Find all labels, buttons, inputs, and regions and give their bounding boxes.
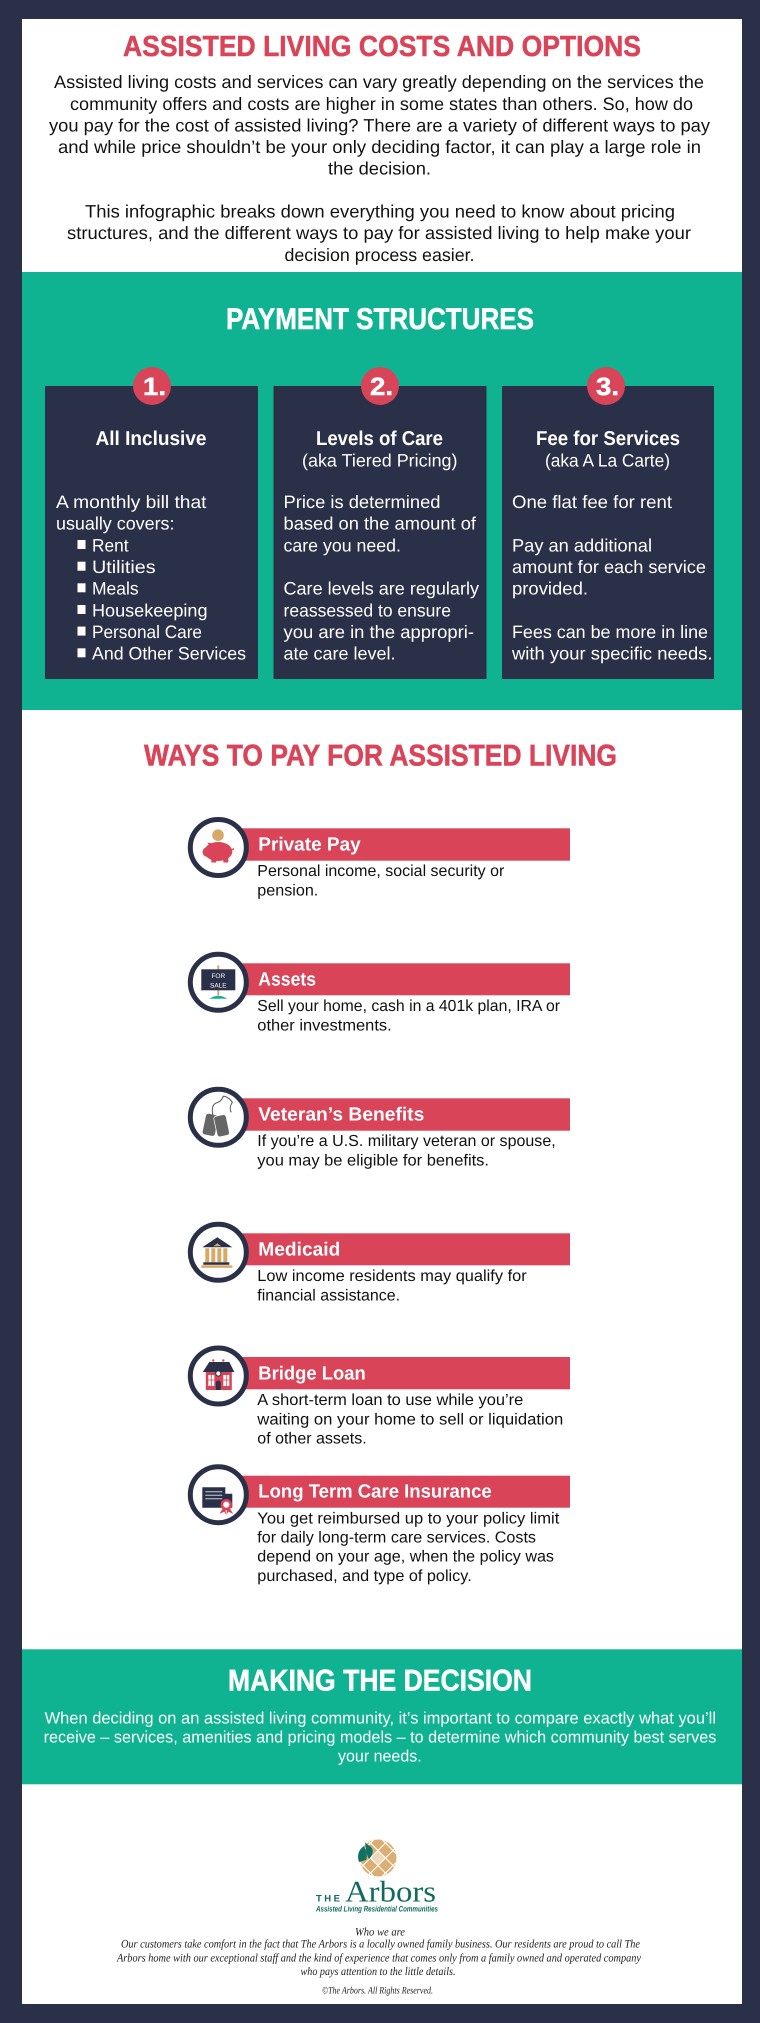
item: bridge loan: of other assets. — [257, 1430, 367, 1447]
card 2: levels of care: reassessed to ensure — [284, 600, 451, 620]
footer: who we are: Our customers take comfort in the fact that The Arbors is a locally owned family business. Our residents are proud to call The — [121, 1939, 640, 1951]
title: ASSISTED LIVING COSTS AND OPTIONS — [123, 31, 641, 63]
item: medicaid: Medicaid — [258, 1239, 340, 1260]
item: long term care insurance — [190, 1467, 570, 1585]
logo: the arbors: THE — [316, 1894, 340, 1905]
card 2: levels of care: care you need. — [284, 535, 401, 555]
logo: the arbors: Arbors — [345, 1876, 436, 1909]
icon: for sale sign: FOR — [211, 973, 225, 980]
item: private pay: Personal income, social security or — [257, 863, 505, 880]
item: assets: Sell your home, cash in a 401k plan, IRA or — [257, 998, 561, 1015]
footer: who we are: ©The Arbors. All Rights Reserved. — [322, 1985, 433, 1996]
item: long term care insurance: Long Term Care Insurance — [258, 1482, 492, 1503]
intro text block — [49, 72, 710, 265]
card 3: fee for services: Fees can be more in line — [512, 622, 708, 642]
item: medicaid: Low income residents may qualify for — [257, 1268, 527, 1285]
heading: making the decision: MAKING THE DECISION — [228, 1665, 532, 1698]
item: veteran's benefits — [190, 1089, 570, 1170]
card 3: fee for services — [502, 367, 714, 679]
item: bridge loan — [190, 1348, 570, 1447]
card 3: fee for services: amount for each service — [512, 557, 706, 577]
card 3: fee for services: Pay an additional — [512, 535, 652, 555]
item: long term care insurance: You get reimbursed up to your policy limit — [257, 1510, 560, 1527]
icon: for sale sign — [201, 965, 235, 999]
heading: ways to pay: WAYS TO PAY FOR ASSISTED LIVING — [144, 739, 617, 772]
item: assets: Assets — [258, 969, 316, 990]
card 2: levels of care: 2. — [370, 373, 393, 401]
intro text block: Assisted living costs and services can vary greatly depending on the services the — [54, 72, 704, 92]
card 1: all inclusive: Housekeeping — [92, 600, 208, 620]
item: medicaid: financial assistance. — [257, 1288, 400, 1305]
item: long term care insurance: purchased, and type of policy. — [257, 1568, 472, 1585]
footer: who we are: who pays attention to the little details. — [300, 1966, 456, 1978]
card 1: all inclusive — [45, 367, 258, 679]
item: assets: other investments. — [257, 1018, 392, 1035]
intro text block: and while price shouldn’t be your only deciding factor, it can play a large role in — [58, 137, 701, 157]
card 1: all inclusive: usually covers: — [56, 514, 174, 534]
item: long term care insurance: depend on your age, when the policy was — [257, 1549, 554, 1566]
card 3: fee for services: (aka A La Carte) — [545, 451, 670, 471]
card 2: levels of care: you are in the appropri- — [284, 622, 474, 642]
item: long term care insurance: for daily long-term care services. Costs — [257, 1530, 536, 1547]
card 2: levels of care: (aka Tiered Pricing) — [302, 451, 458, 471]
item: veteran's benefits: you may be eligible for benefits. — [257, 1153, 489, 1170]
item: bridge loan: Bridge Loan — [258, 1363, 366, 1384]
decision text block — [44, 1709, 716, 1766]
intro text block: decision process easier. — [284, 245, 474, 265]
item: medicaid — [190, 1224, 570, 1305]
item: veteran's benefits: If you’re a U.S. military veteran or spouse, — [257, 1133, 556, 1150]
intro text block: community offers and costs are higher in some states than others. So, how do — [70, 94, 693, 114]
intro text block: This infographic breaks down everything you need to know about pricing — [85, 202, 675, 222]
item: veteran's benefits: Veteran’s Benefits — [258, 1105, 424, 1126]
decision text block: receive – services, amenities and pricing models – to determine which community best serves — [44, 1729, 716, 1747]
decision text block: When deciding on an assisted living community, it’s important to compare exactly what you’ll — [45, 1709, 716, 1727]
icon: house — [203, 1359, 234, 1390]
intro text block: the decision. — [328, 158, 431, 178]
card 1: all inclusive: And Other Services — [92, 644, 246, 664]
card 1: all inclusive: A monthly bill that — [56, 492, 207, 512]
card 2: levels of care: Levels of Care — [316, 428, 443, 450]
logo: the arbors — [316, 1840, 438, 1914]
icon: piggy bank — [202, 829, 234, 862]
card 3: fee for services: 3. — [596, 373, 619, 401]
intro text block: structures, and the different ways to pay for assisted living to help make your — [67, 223, 691, 243]
item: bridge loan: waiting on your home to sell or liquidation — [256, 1411, 563, 1428]
panel: introduction — [49, 31, 710, 265]
card 1: all inclusive: 1. — [143, 373, 166, 401]
item: assets — [190, 954, 570, 1035]
icon: bank building — [201, 1237, 232, 1268]
heading: payment structures: PAYMENT STRUCTURES — [226, 303, 534, 336]
card 3: fee for services: provided. — [512, 579, 588, 599]
intro text block: you pay for the cost of assisted living? There are a variety of different ways to pay — [49, 116, 710, 136]
card 2: levels of care: Care levels are regularly — [284, 579, 479, 599]
panel: payment structures — [22, 272, 742, 710]
item: private pay: pension. — [257, 882, 318, 900]
icon: for sale sign: SALE — [210, 982, 227, 989]
card 1: all inclusive: Rent — [92, 535, 128, 555]
card 2: levels of care: based on the amount of — [284, 514, 477, 534]
item: private pay — [190, 820, 570, 900]
item: bridge loan: A short-term loan to use while you’re — [257, 1392, 523, 1409]
card 1: all inclusive: Meals — [92, 579, 139, 599]
card 2: levels of care: Price is determined — [284, 492, 440, 512]
card 2: levels of care — [274, 367, 486, 679]
panel: making the decision — [22, 1649, 742, 1784]
logo: the arbors: Assisted Living Residential Communities — [315, 1905, 438, 1914]
icon: certificate — [202, 1487, 233, 1515]
item: private pay: Private Pay — [258, 835, 361, 856]
decision text block: your needs. — [338, 1748, 422, 1766]
card 1: all inclusive: Utilities — [92, 557, 156, 577]
icon: dog tags — [202, 1096, 232, 1137]
card 1: all inclusive: Personal Care — [92, 622, 202, 642]
logo emblem — [358, 1840, 396, 1876]
card 3: fee for services: with your specific needs. — [511, 644, 712, 664]
footer: who we are — [116, 1927, 642, 1996]
card 3: fee for services: One flat fee for rent — [512, 492, 672, 512]
card 1: all inclusive: All Inclusive — [96, 428, 206, 450]
footer: who we are: Who we are — [355, 1927, 405, 1939]
card 3: fee for services: Fee for Services — [536, 428, 680, 450]
card 2: levels of care: ate care level. — [284, 644, 396, 664]
footer: who we are: Arbors home with our exceptional staff and the kind of experience that comes only from a family owned and operated company — [116, 1952, 642, 1964]
